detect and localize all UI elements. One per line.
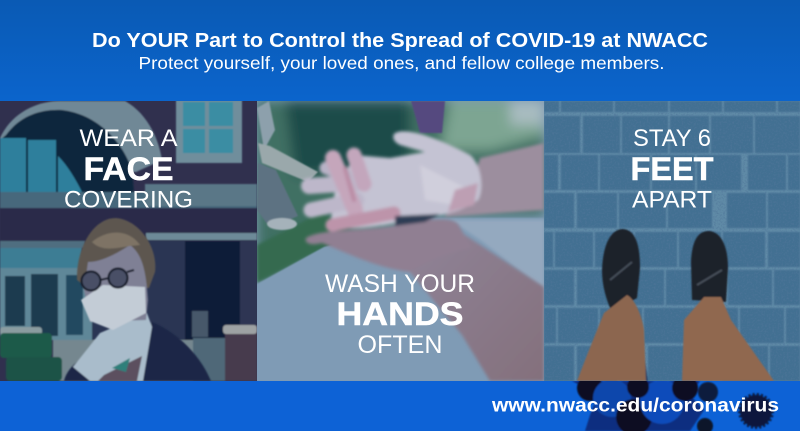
right leg and shoe bbox=[682, 231, 774, 381]
website url: www.nwacc.edu/coronavirus bbox=[491, 394, 779, 416]
stone grain bbox=[544, 101, 800, 381]
icon: coronavirus graphic bbox=[572, 375, 772, 431]
panel: wear a face covering bbox=[0, 100, 257, 381]
person with mask bbox=[64, 218, 211, 381]
sink basin bbox=[257, 218, 544, 290]
text: wear a face covering: FACE bbox=[84, 151, 174, 187]
text: wear a face covering: WEAR A bbox=[80, 125, 178, 152]
text: wear a face covering: COVERING bbox=[64, 186, 193, 214]
text: stay 6 feet apart: APART bbox=[632, 186, 712, 214]
panel: wash your hands often bbox=[257, 101, 544, 381]
paving stones bbox=[544, 101, 800, 381]
soapy upper hand bbox=[330, 131, 481, 228]
panel: stay 6 feet apart bbox=[544, 101, 800, 381]
forearm lower bbox=[410, 235, 544, 381]
left leg and shoe bbox=[577, 229, 648, 381]
text: wash your hands often bbox=[325, 274, 474, 353]
text: stay 6 feet apart: STAY 6 bbox=[633, 125, 711, 152]
text: wash your hands often: HANDS bbox=[336, 296, 464, 332]
text: stay 6 feet apart: FEET bbox=[630, 151, 714, 187]
forearm upper bbox=[444, 143, 544, 217]
green background bbox=[257, 101, 544, 285]
lower hand bbox=[306, 219, 472, 272]
hands bbox=[306, 131, 544, 381]
text: wash your hands often: OFTEN bbox=[358, 331, 442, 359]
patterned fabric bbox=[411, 101, 445, 133]
subtitle: Protect yourself, your loved ones, and fellow college members. bbox=[138, 53, 664, 73]
title: Do YOUR Part to Control the Spread of COVID-19 at NWACC bbox=[92, 30, 708, 52]
text: stay 6 feet apart bbox=[632, 129, 714, 208]
text: wear a face covering bbox=[65, 130, 192, 208]
faucet bbox=[257, 101, 318, 230]
header band bbox=[0, 0, 800, 101]
footer band bbox=[0, 381, 800, 431]
text: wash your hands often: WASH YOUR bbox=[325, 270, 475, 298]
building photo bbox=[0, 100, 257, 381]
